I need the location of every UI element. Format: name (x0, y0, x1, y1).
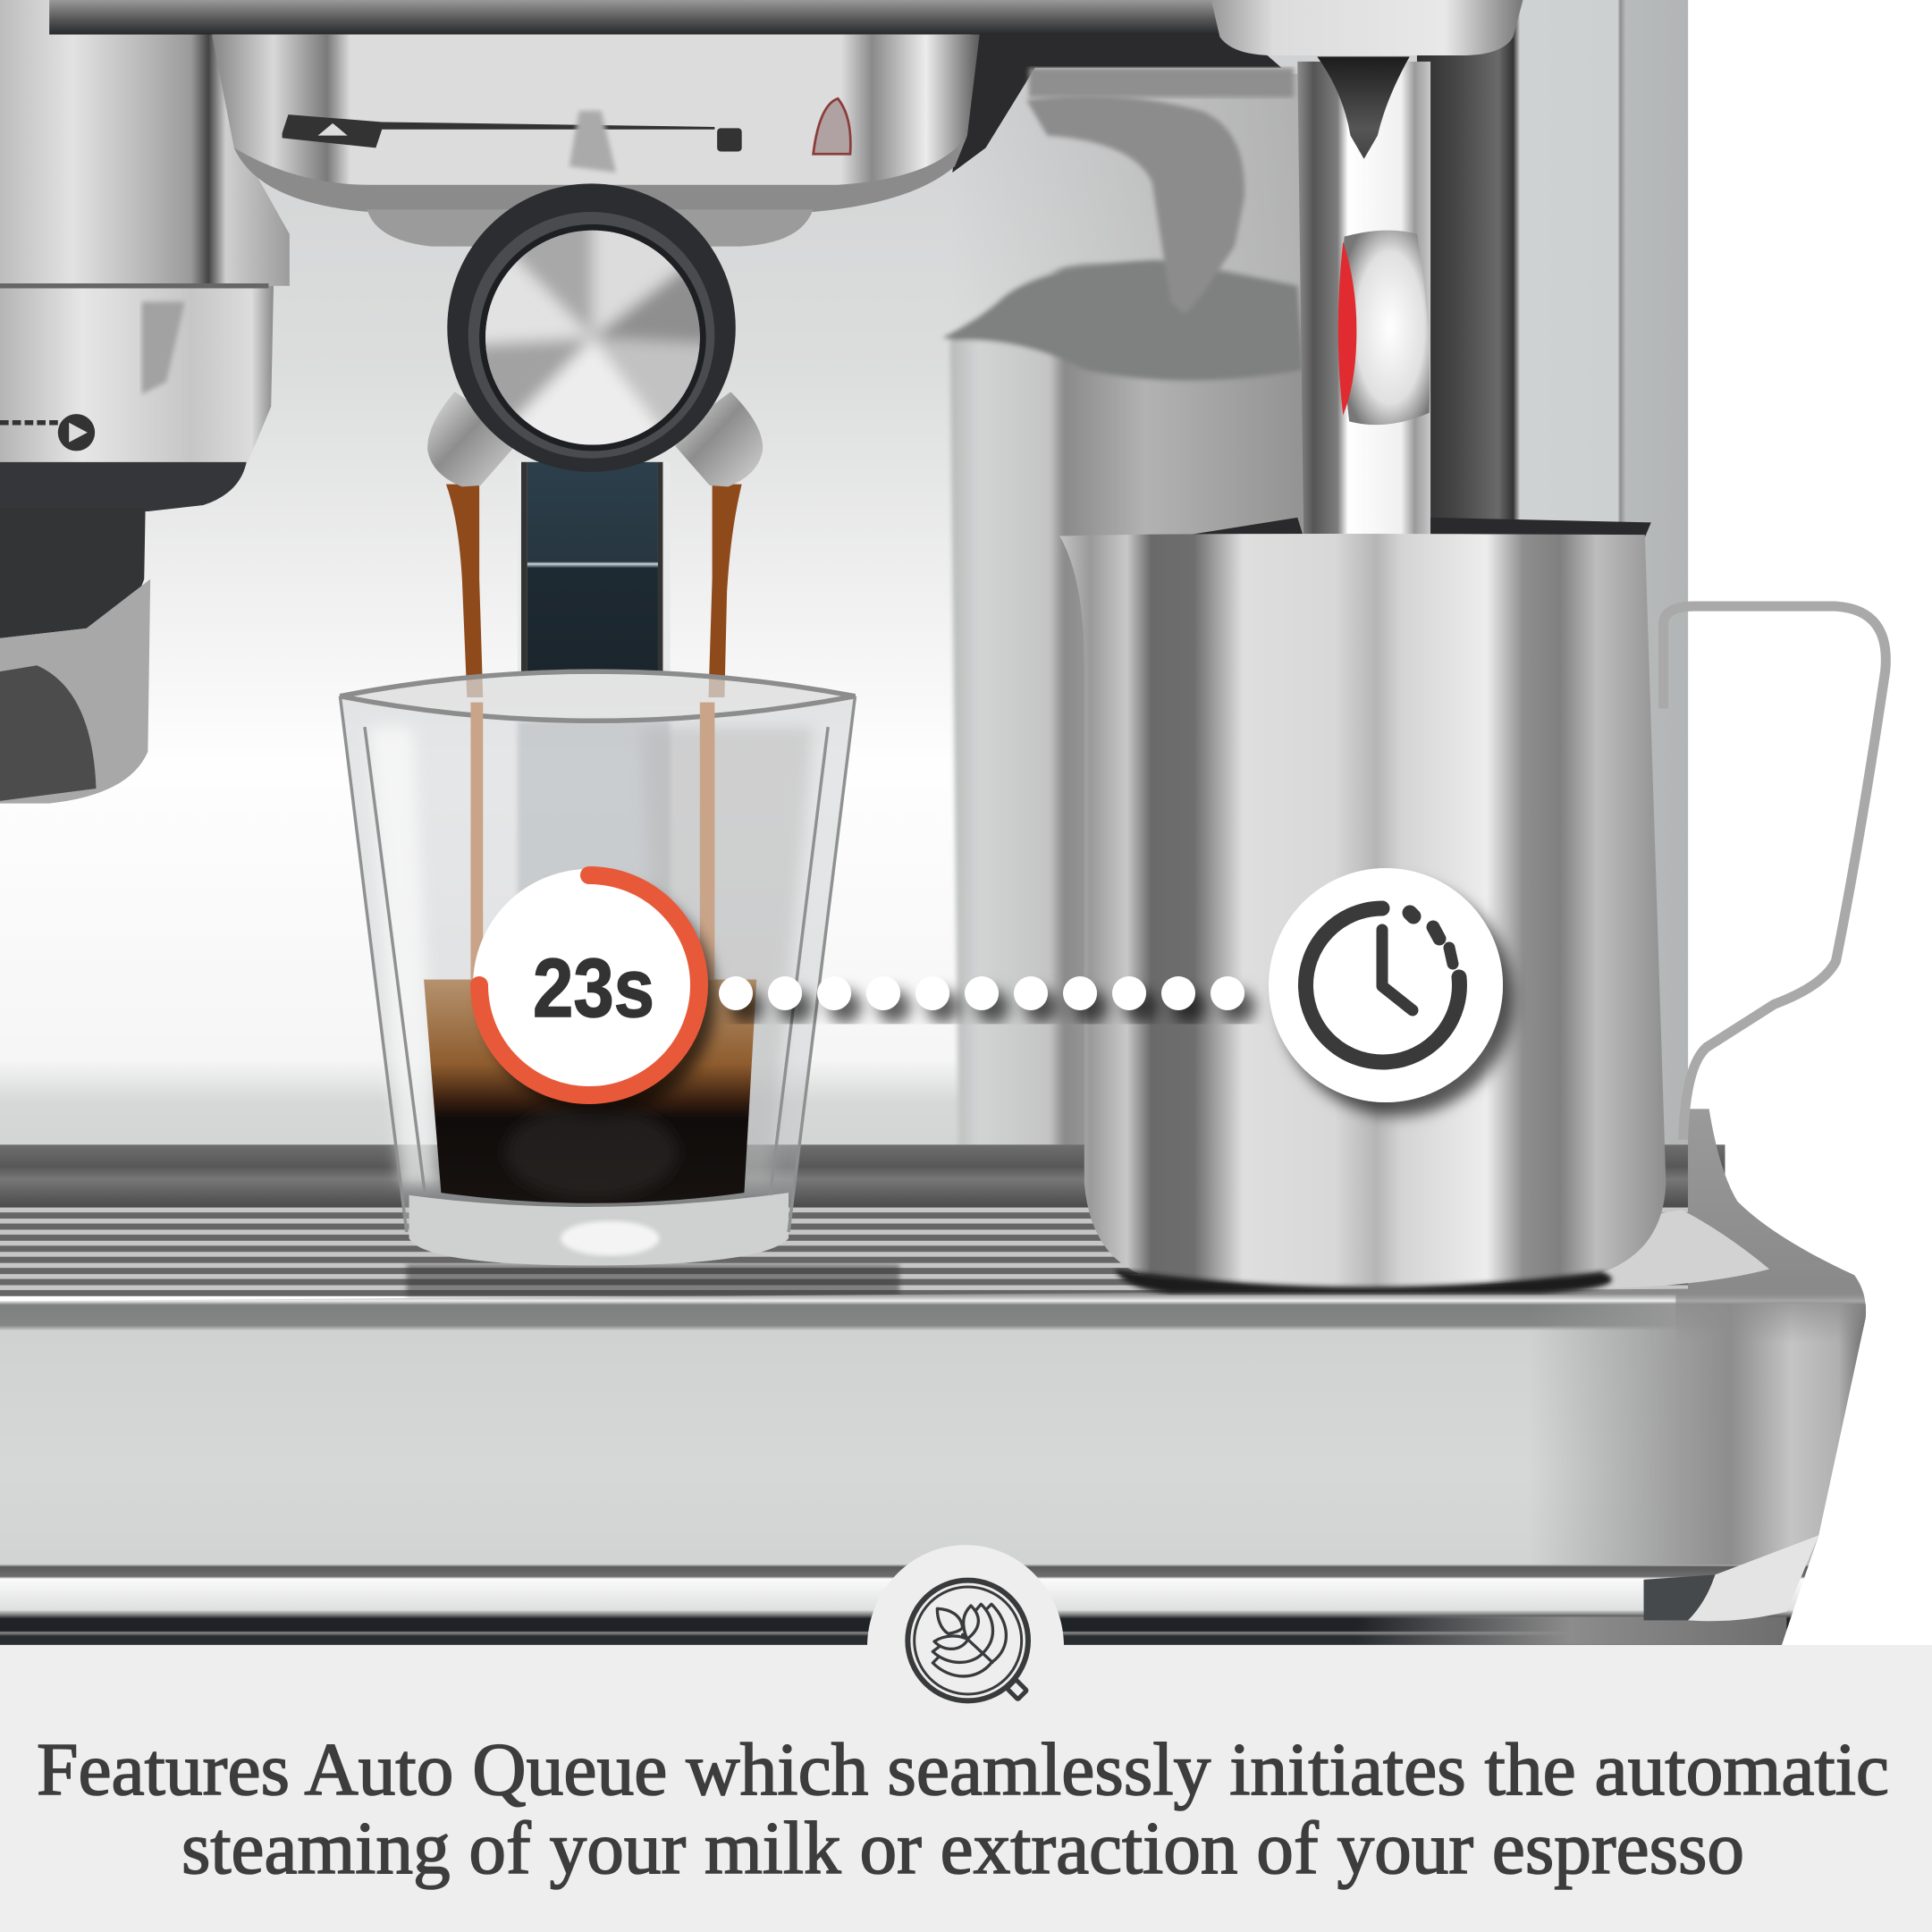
caption text line 2: steaming of your milk or extraction of your espresso (181, 1807, 1744, 1890)
espresso glass (340, 671, 855, 1265)
front milk pitcher (1059, 534, 1666, 1294)
left grinder body (0, 0, 290, 804)
top group head (49, 0, 1219, 247)
indicator capsule (1342, 231, 1430, 425)
white wall right (1688, 0, 1932, 1651)
machine right column (1417, 0, 1688, 1183)
badge disc (1269, 868, 1503, 1102)
dark water column (518, 462, 671, 674)
timer badge: 23s (473, 869, 705, 1101)
upper steel bracket (1029, 68, 1294, 97)
pitcher handle (1664, 606, 1886, 1140)
tray plate right corner (1577, 1210, 1769, 1289)
portafilter knob (447, 183, 736, 472)
glass base (409, 1193, 789, 1265)
portafilter spouts (427, 392, 763, 486)
dark upper arm (952, 25, 1281, 173)
caption panel (0, 1545, 1932, 1932)
dotted connector (719, 976, 1244, 1010)
machine base front (0, 1109, 1866, 1645)
steam wand (1211, 0, 1523, 542)
clock badge (1269, 868, 1503, 1102)
backdrop (0, 0, 1688, 1232)
back milk jug (942, 95, 1306, 1159)
semicircle tab (867, 1545, 1064, 1647)
wand nozzle (1317, 56, 1410, 159)
backdrop shade behind jug (949, 74, 1306, 369)
badge disc (473, 869, 705, 1101)
steam head (1211, 0, 1523, 55)
clock icon (1305, 908, 1459, 1062)
espresso liquid (424, 980, 756, 1203)
orange progress ring (479, 875, 699, 1095)
pitcher inner rim shadow (1159, 518, 1651, 540)
base right shading (1355, 1109, 1873, 1646)
caption text line 1: Features Auto Queue which seamlessly initiates the automatic (37, 1728, 1889, 1811)
icon: latte cup (907, 1581, 1028, 1700)
drip tray (0, 1144, 1725, 1296)
coffee streams (446, 485, 742, 697)
panel band (0, 1645, 1932, 1932)
dashed arrow marker (0, 414, 95, 451)
timer value: 23s (533, 941, 654, 1034)
glass rim (340, 671, 855, 721)
red indicator (1338, 241, 1356, 415)
